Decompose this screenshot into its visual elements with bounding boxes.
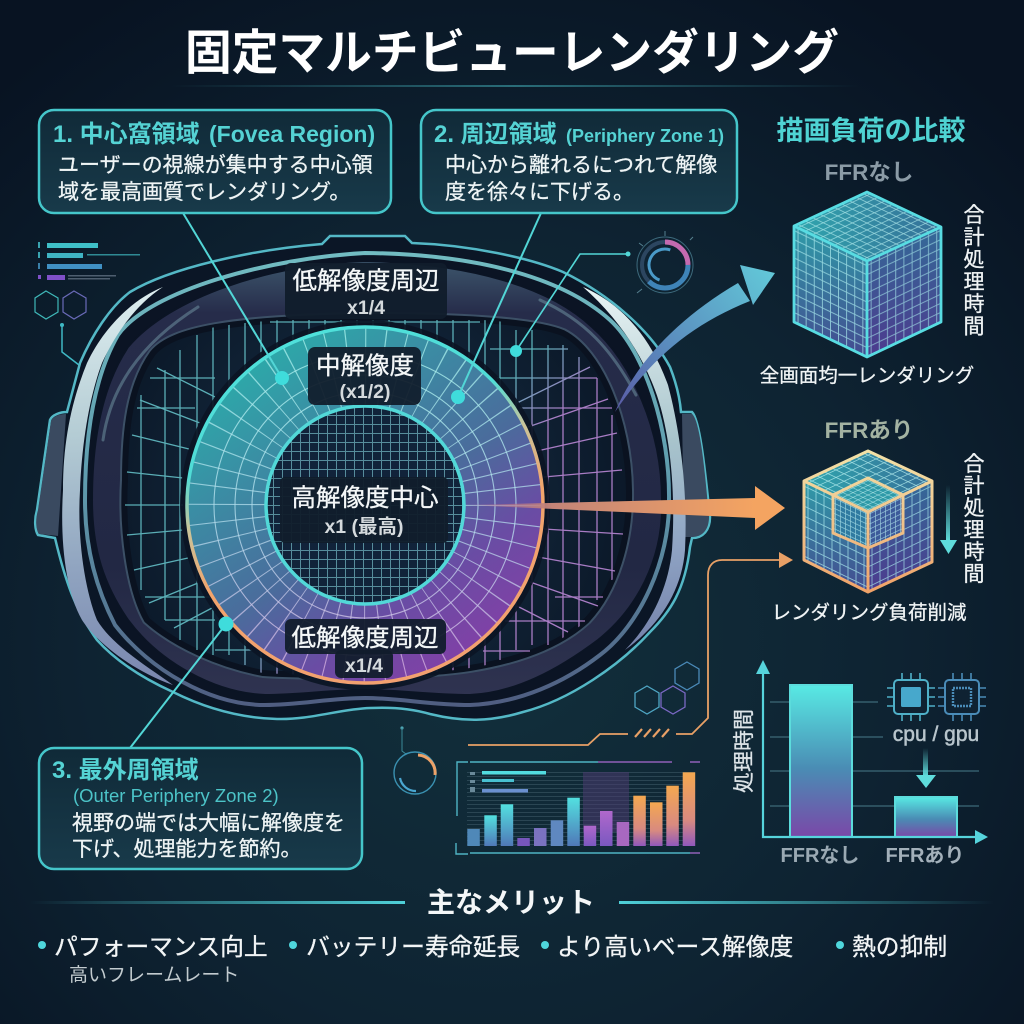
benefit 1: パフォーマンス向上: [54, 934, 268, 961]
benefit 3: より高いベース解像度: [557, 934, 793, 961]
callout 1: fovea: [39, 110, 391, 385]
pointer: top right dot: [510, 252, 630, 357]
caption: load reduction: レンダリング負荷削減: [771, 602, 967, 624]
callout 2: periphery zone 1: 中心から離れるにつれて解像: [445, 154, 717, 177]
side tabs: [36, 414, 709, 537]
vertical label: total processing time: 理: [964, 519, 984, 542]
label: cpu / gpu: cpu / gpu: [893, 723, 979, 746]
decoration: top-left status bars: [38, 242, 140, 280]
shell highlight right: [583, 287, 686, 650]
ring outer edge: [187, 327, 543, 683]
callout 1: fovea: (Fovea Region): [209, 121, 375, 147]
zone label: medium resolution: (x1/2): [340, 381, 390, 403]
headset inner teal band: [85, 253, 669, 705]
zone label: high resolution: 高解像度中心: [292, 484, 438, 512]
zone label: bottom low resolution: [285, 619, 446, 678]
callout 3: outer periphery zone 2: (Outer Periphery Zone 2): [73, 785, 279, 806]
chart mini bars: [470, 771, 546, 792]
benefit 1: 高いフレームレート: [69, 964, 239, 986]
zone label: medium resolution: 中解像度: [316, 352, 414, 380]
arrow: cpu gpu down: [916, 748, 936, 788]
zone label: top low resolution: [285, 263, 447, 319]
arrow: orange to FFR cube: [465, 486, 785, 530]
x label: with FFR: FFRあり: [886, 844, 964, 867]
gasket highlight: [103, 300, 636, 440]
peripheral grid: [125, 320, 623, 675]
decoration: gauge bottom: [394, 726, 436, 794]
chart gridlines: [770, 702, 979, 806]
vertical label: total processing time: 時: [964, 293, 984, 316]
vertical label: total processing time: 処: [964, 497, 984, 520]
callout 1: fovea: 1. 中心窩領域: [53, 121, 200, 148]
vertical label: total processing time: 間: [964, 316, 984, 338]
vertical label: total processing time: 間: [964, 563, 984, 586]
concentric foveation rings: [180, 320, 550, 690]
ring dark halo: [180, 320, 550, 690]
VR headset: [35, 236, 710, 720]
callout 2: periphery zone 1: 度を徐々に下げる。: [445, 181, 634, 204]
bar: with FFR: [895, 797, 957, 837]
vertical label: total processing time: 合: [964, 204, 984, 227]
zone label: bottom low resolution: x1/4: [345, 655, 383, 677]
benefits divider right: [619, 901, 994, 904]
vertical label: total processing time: 合: [964, 453, 984, 476]
y axis label: 処理時間: [733, 709, 756, 793]
vertical label: total processing time: 処: [964, 249, 984, 272]
callout 1: fovea: ユーザーの視線が集中する中心領: [58, 154, 373, 177]
high resolution center: [266, 406, 464, 604]
cube: foveated render: [804, 451, 932, 592]
bar: without FFR: [790, 685, 852, 837]
chart: processing time comparison: [733, 660, 988, 867]
zone label: high resolution: [280, 477, 448, 543]
x label: without FFR: FFRなし: [781, 844, 859, 867]
headset outer outline: [35, 236, 710, 720]
title: 固定マルチビューレンダリング: [185, 27, 839, 80]
shell highlight left: [62, 287, 173, 685]
lens window rim: [124, 317, 629, 675]
mid resolution ring: [226, 366, 504, 644]
icon: GPU chip: [938, 673, 986, 721]
decoration: gauge top right: [637, 231, 693, 293]
callout 1: fovea: 域を最高画質でレンダリング。: [58, 181, 350, 204]
decoration: hexagons and pointer top-left: [35, 291, 86, 365]
label: with FFR: FFRあり: [825, 418, 913, 443]
zone label: high resolution: x1 (最高): [324, 515, 404, 538]
callout 3: outer periphery zone 2: 視野の端では大幅に解像度を: [72, 812, 345, 835]
ring polar grid: [214, 354, 516, 656]
benefit 4: 熱の抑制: [852, 934, 947, 961]
dashboard bar chart: [456, 762, 700, 854]
lens window: [124, 317, 629, 675]
benefits heading: 主なメリット: [427, 887, 595, 918]
axis arrowheads: [756, 660, 988, 844]
chart frame: [456, 762, 690, 854]
chart axes: [763, 670, 978, 837]
callout 2: periphery zone 1: 2. 周辺領域: [434, 121, 557, 148]
connector: orange line to FFR cube: [468, 552, 793, 745]
caption: uniform rendering: 全画面均一レンダリング: [760, 365, 974, 387]
cube: full render: [794, 192, 941, 357]
vertical label: total processing time: 時: [964, 541, 984, 564]
callout 3: outer periphery zone 2: 下げ、処理能力を節約。: [72, 838, 302, 861]
label: without FFR: FFRなし: [825, 160, 913, 185]
section heading: render load comparison: 描画負荷の比較: [776, 116, 966, 146]
callout 2: periphery zone 1: [421, 110, 737, 404]
decoration: hexagons bottom: [635, 662, 699, 714]
zone label: top low resolution: 低解像度周辺: [292, 267, 440, 295]
vertical label: total processing time: 理: [964, 271, 984, 294]
padded gasket: [92, 261, 662, 695]
benefit 1: [38, 934, 268, 986]
callout 3: outer periphery zone 2: 3. 最外周領域: [52, 757, 199, 784]
icon: CPU chip: [887, 673, 935, 721]
zone label: bottom low resolution: 低解像度周辺: [292, 624, 438, 652]
benefits divider left: [30, 901, 405, 904]
section: main benefits: [30, 887, 994, 986]
zone label: medium resolution: [308, 347, 421, 405]
benefit 2: バッテリー寿命延長: [306, 934, 520, 961]
arrow: reduced time: [940, 485, 957, 554]
inner high resolution cube: [804, 478, 932, 548]
vertical label: total processing time: 計: [964, 226, 984, 249]
callout 2: periphery zone 1: (Periphery Zone 1): [566, 126, 724, 146]
arrow: blue to no-FFR cube: [615, 265, 775, 412]
vertical label: total processing time: 計: [964, 475, 984, 498]
chart scanlines: [467, 772, 695, 846]
callout 3: outer periphery zone 2: [39, 616, 362, 869]
chart bars: [467, 772, 695, 846]
zone label: top low resolution: x1/4: [347, 297, 385, 319]
